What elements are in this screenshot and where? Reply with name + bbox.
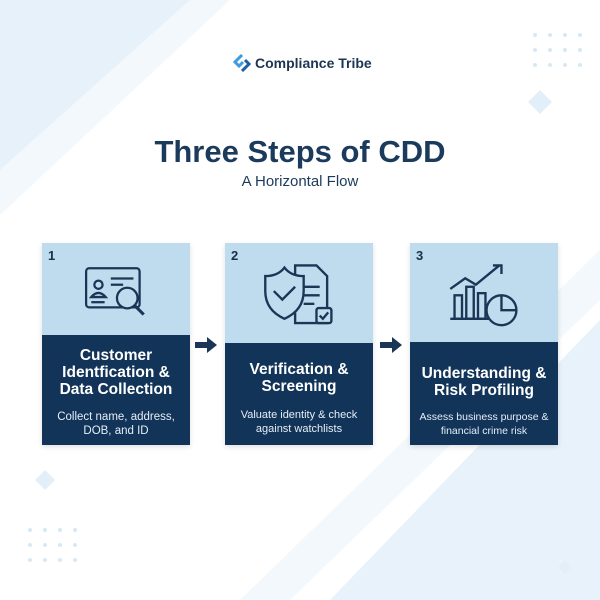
- text block: step 3: Assess business purpose &: [420, 411, 548, 423]
- icon: charts: [450, 264, 518, 326]
- icon: logo mark: [233, 54, 251, 72]
- panel: step 2: 2: [231, 248, 238, 263]
- text block: step 3: Risk Profiling: [434, 382, 534, 399]
- arrow 2: [380, 337, 402, 353]
- panel: step 3: [410, 243, 558, 445]
- text block: step 2: Verification &: [249, 361, 349, 378]
- logo: Compliance Tribe: [255, 55, 372, 71]
- text block: step 2: [225, 343, 373, 445]
- text block: step 3: financial crime risk: [441, 425, 527, 437]
- icon: ID card with magnifier: [85, 267, 145, 316]
- text block: step 1: DOB, and ID: [83, 425, 149, 437]
- text block: step 3: Understanding &: [422, 365, 546, 382]
- text block: step 1: Data Collection: [60, 381, 172, 398]
- text block: step 2: Valuate identity & check: [241, 409, 357, 421]
- subtitle: A Horizontal Flow: [242, 173, 358, 190]
- text block: step 2: Screening: [262, 378, 336, 395]
- panel: step 1: 1: [48, 248, 55, 263]
- panel: step 2: [225, 243, 373, 445]
- text block: step 1: Customer: [80, 347, 152, 364]
- panel: step 3: 3: [416, 248, 423, 263]
- panel: step 1: [42, 243, 190, 445]
- text block: step 3: [410, 342, 558, 445]
- arrow 1: [195, 337, 217, 353]
- title: Three Steps of CDD: [154, 134, 446, 169]
- icon: shield with document: [264, 264, 333, 324]
- text block: step 2: against watchlists: [256, 423, 342, 435]
- text block: step 1: Identfication &: [62, 364, 170, 381]
- text block: step 1: [42, 335, 190, 445]
- text block: step 1: Collect name, address,: [57, 411, 175, 423]
